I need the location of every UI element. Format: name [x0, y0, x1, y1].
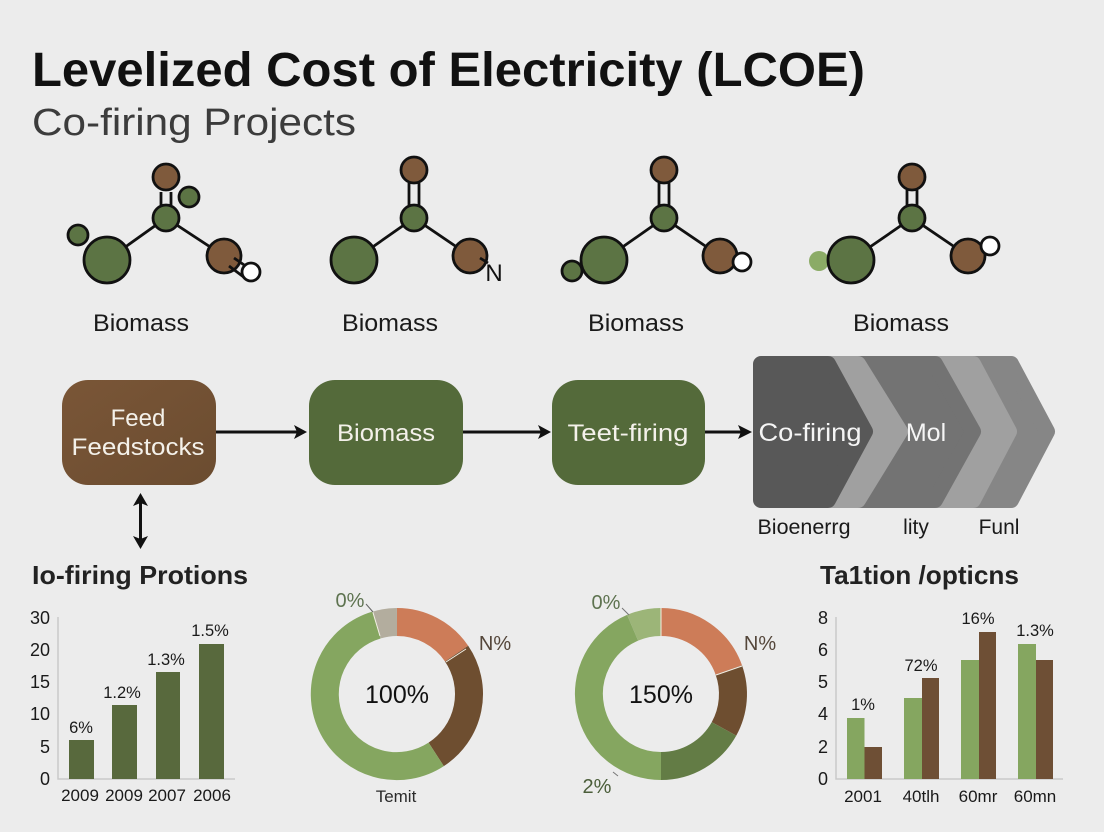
donut chart: 100%	[325, 590, 511, 806]
arrow: biomass to firing	[463, 425, 551, 439]
bar chart: right: 1%	[851, 696, 875, 714]
label: molecule 1: Biomass	[93, 310, 189, 337]
donut chart: 100%: 100%	[365, 681, 429, 709]
chevron caption: lity: lity	[903, 516, 929, 539]
label: molecule 4: Biomass	[853, 310, 949, 337]
molecule 2	[331, 157, 503, 287]
bar chart: right: 72%	[904, 657, 938, 675]
bar chart: right: 8	[818, 608, 828, 628]
bar chart: left: 2007	[148, 786, 186, 805]
bar chart: left: 20	[30, 640, 50, 660]
bar chart: left: 1.2%	[103, 684, 141, 702]
bar chart: right: 2	[818, 737, 828, 757]
chevron caption: Funl: Funl	[979, 516, 1019, 539]
bar chart: left: 2009	[105, 786, 143, 805]
double-headed arrow	[133, 493, 148, 549]
process box: biomass	[309, 380, 463, 485]
donut chart: 100%: Temit	[376, 787, 417, 806]
donut chart: 150%: 0%	[592, 592, 621, 614]
label: molecule 3: Biomass	[588, 310, 684, 337]
process box: feedstocks	[62, 380, 216, 485]
heading: right bar chart: Ta1tion /opticns	[820, 560, 1019, 590]
process box: teet-firing	[552, 380, 705, 485]
donut chart: 100%: N%	[479, 633, 511, 655]
bar chart: right: 2001	[844, 787, 882, 806]
bar chart: right: 1.3%	[1016, 622, 1054, 640]
title: Levelized Cost of Electricity (LCOE)	[32, 44, 865, 97]
bar chart: right: 16%	[961, 610, 995, 628]
arrow: firing to chevrons	[705, 425, 752, 439]
process box: feedstocks: Feed	[111, 405, 165, 432]
donut chart: 150%: 2%	[583, 776, 612, 798]
bar chart: left	[30, 608, 235, 805]
bar chart: right: 4	[818, 704, 828, 724]
bar chart: left: 0	[40, 769, 50, 789]
bar chart: left: 1.3%	[147, 651, 185, 669]
donut chart: 150%	[583, 592, 776, 798]
bar chart: left: 6%	[69, 719, 93, 737]
molecule 1	[68, 164, 260, 283]
bar chart: left: 30	[30, 608, 50, 628]
arrow: feedstocks to biomass	[216, 425, 307, 439]
bar chart: right: 6	[818, 640, 828, 660]
bar chart: right: 0	[818, 769, 828, 789]
bar chart: left: 15	[30, 672, 50, 692]
bar chart: right: 60mr	[959, 787, 998, 806]
subtitle: Co-firing Projects	[32, 102, 356, 144]
process box: biomass: Biomass	[337, 420, 435, 447]
donut chart: 100%: 0%	[336, 590, 365, 612]
bar chart: right: 40tlh	[903, 787, 939, 806]
donut chart: 150%: N%	[744, 633, 776, 655]
label: molecule 2: Biomass	[342, 310, 438, 337]
chevron process: Mol	[906, 419, 946, 447]
molecule 3	[562, 157, 751, 283]
donut chart: 150%: 150%	[629, 681, 693, 709]
bar chart: left: 2009	[61, 786, 99, 805]
molecule 2: N	[485, 260, 503, 287]
bar chart: right	[818, 608, 1063, 806]
bar chart: left: 2006	[193, 786, 231, 805]
heading: left bar chart: Io-firing Protions	[32, 560, 248, 590]
bar chart: left: 10	[30, 704, 50, 724]
chevron process: Co-firing	[758, 419, 862, 447]
bar chart: left: 1.5%	[191, 622, 229, 640]
bar chart: right: 5	[818, 672, 828, 692]
bar chart: right: 60mn	[1014, 787, 1056, 806]
process box: feedstocks: Feedstocks	[72, 434, 204, 461]
bar chart: left: 5	[40, 737, 50, 757]
process box: teet-firing: Teet-firing	[568, 420, 688, 447]
chevron process	[758, 364, 1047, 500]
molecule 4	[809, 164, 999, 283]
chevron caption: Bioenerrg: Bioenerrg	[758, 516, 850, 539]
